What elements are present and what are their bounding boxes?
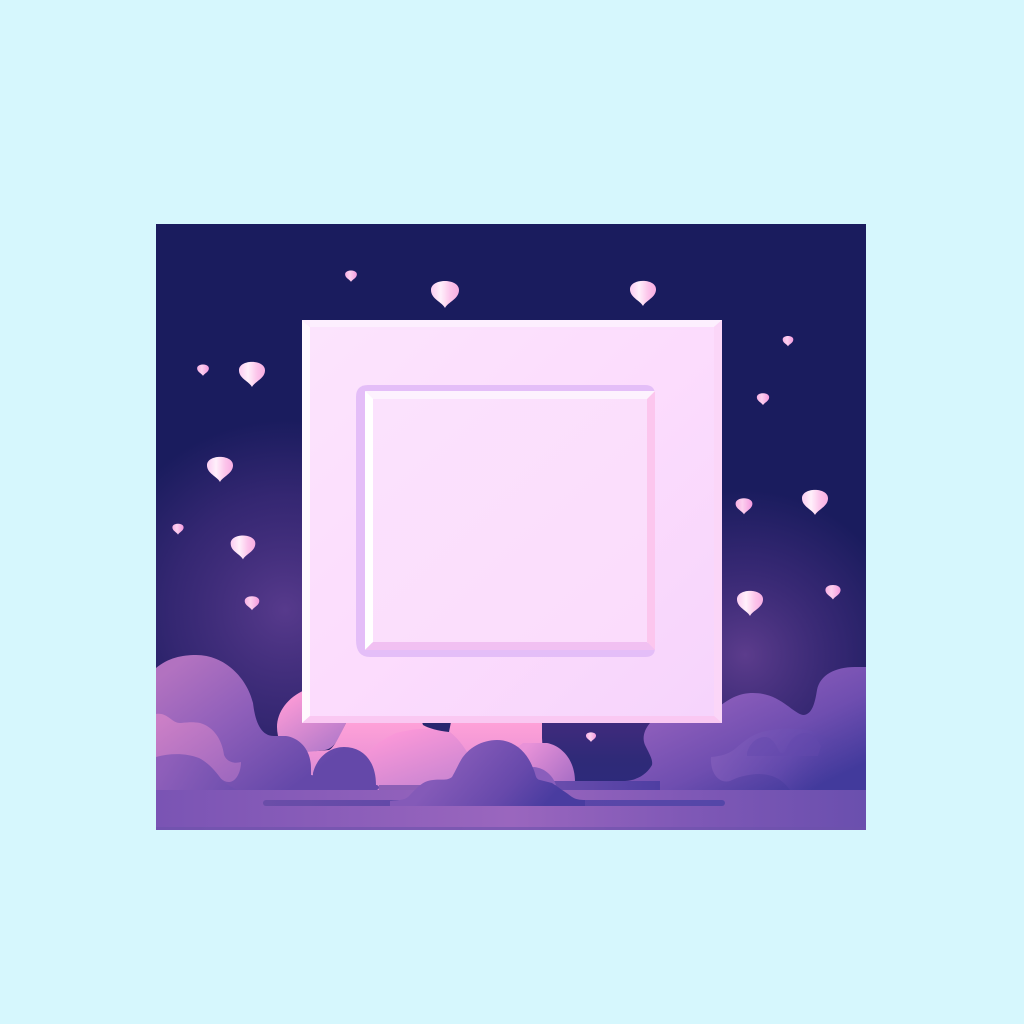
infographic scene (156, 224, 866, 830)
heart icon (825, 585, 841, 600)
left lower cloud (156, 754, 221, 778)
heart icon (630, 281, 656, 306)
right large cloud (620, 667, 866, 795)
heart icon (197, 365, 209, 376)
pink clouds behind card (277, 690, 575, 790)
heart icon (737, 591, 763, 616)
small cloud (313, 747, 379, 790)
center cloud (390, 740, 585, 806)
ground band (156, 781, 866, 830)
heart icon (172, 524, 184, 535)
card (302, 320, 722, 723)
heart icon (431, 281, 459, 308)
dark notch (422, 722, 451, 732)
right cloud overlay (711, 750, 784, 782)
pink inner blob (375, 729, 467, 790)
sky background (156, 224, 866, 830)
hearts floating in sky (172, 271, 841, 742)
heart icon (245, 596, 259, 610)
heart icon (345, 271, 357, 282)
left light cloud (156, 714, 241, 782)
heart icon (736, 498, 752, 514)
heart icon (239, 362, 265, 387)
heart icon (757, 393, 769, 405)
pink right lobe (518, 743, 575, 781)
heart icon (231, 536, 255, 559)
pink left lobe (277, 691, 346, 752)
center cloud small bump (532, 767, 556, 785)
heart icon (207, 457, 233, 482)
left big cloud (156, 655, 313, 790)
ground shadow bar (263, 800, 725, 806)
card inset panel (356, 385, 655, 657)
right cloud inner bumps (748, 740, 756, 750)
heart icon (586, 732, 596, 742)
heart icon (783, 336, 793, 346)
panel: night sky scene (156, 224, 866, 830)
pink main cloud (308, 723, 542, 776)
heart icon (802, 490, 828, 515)
